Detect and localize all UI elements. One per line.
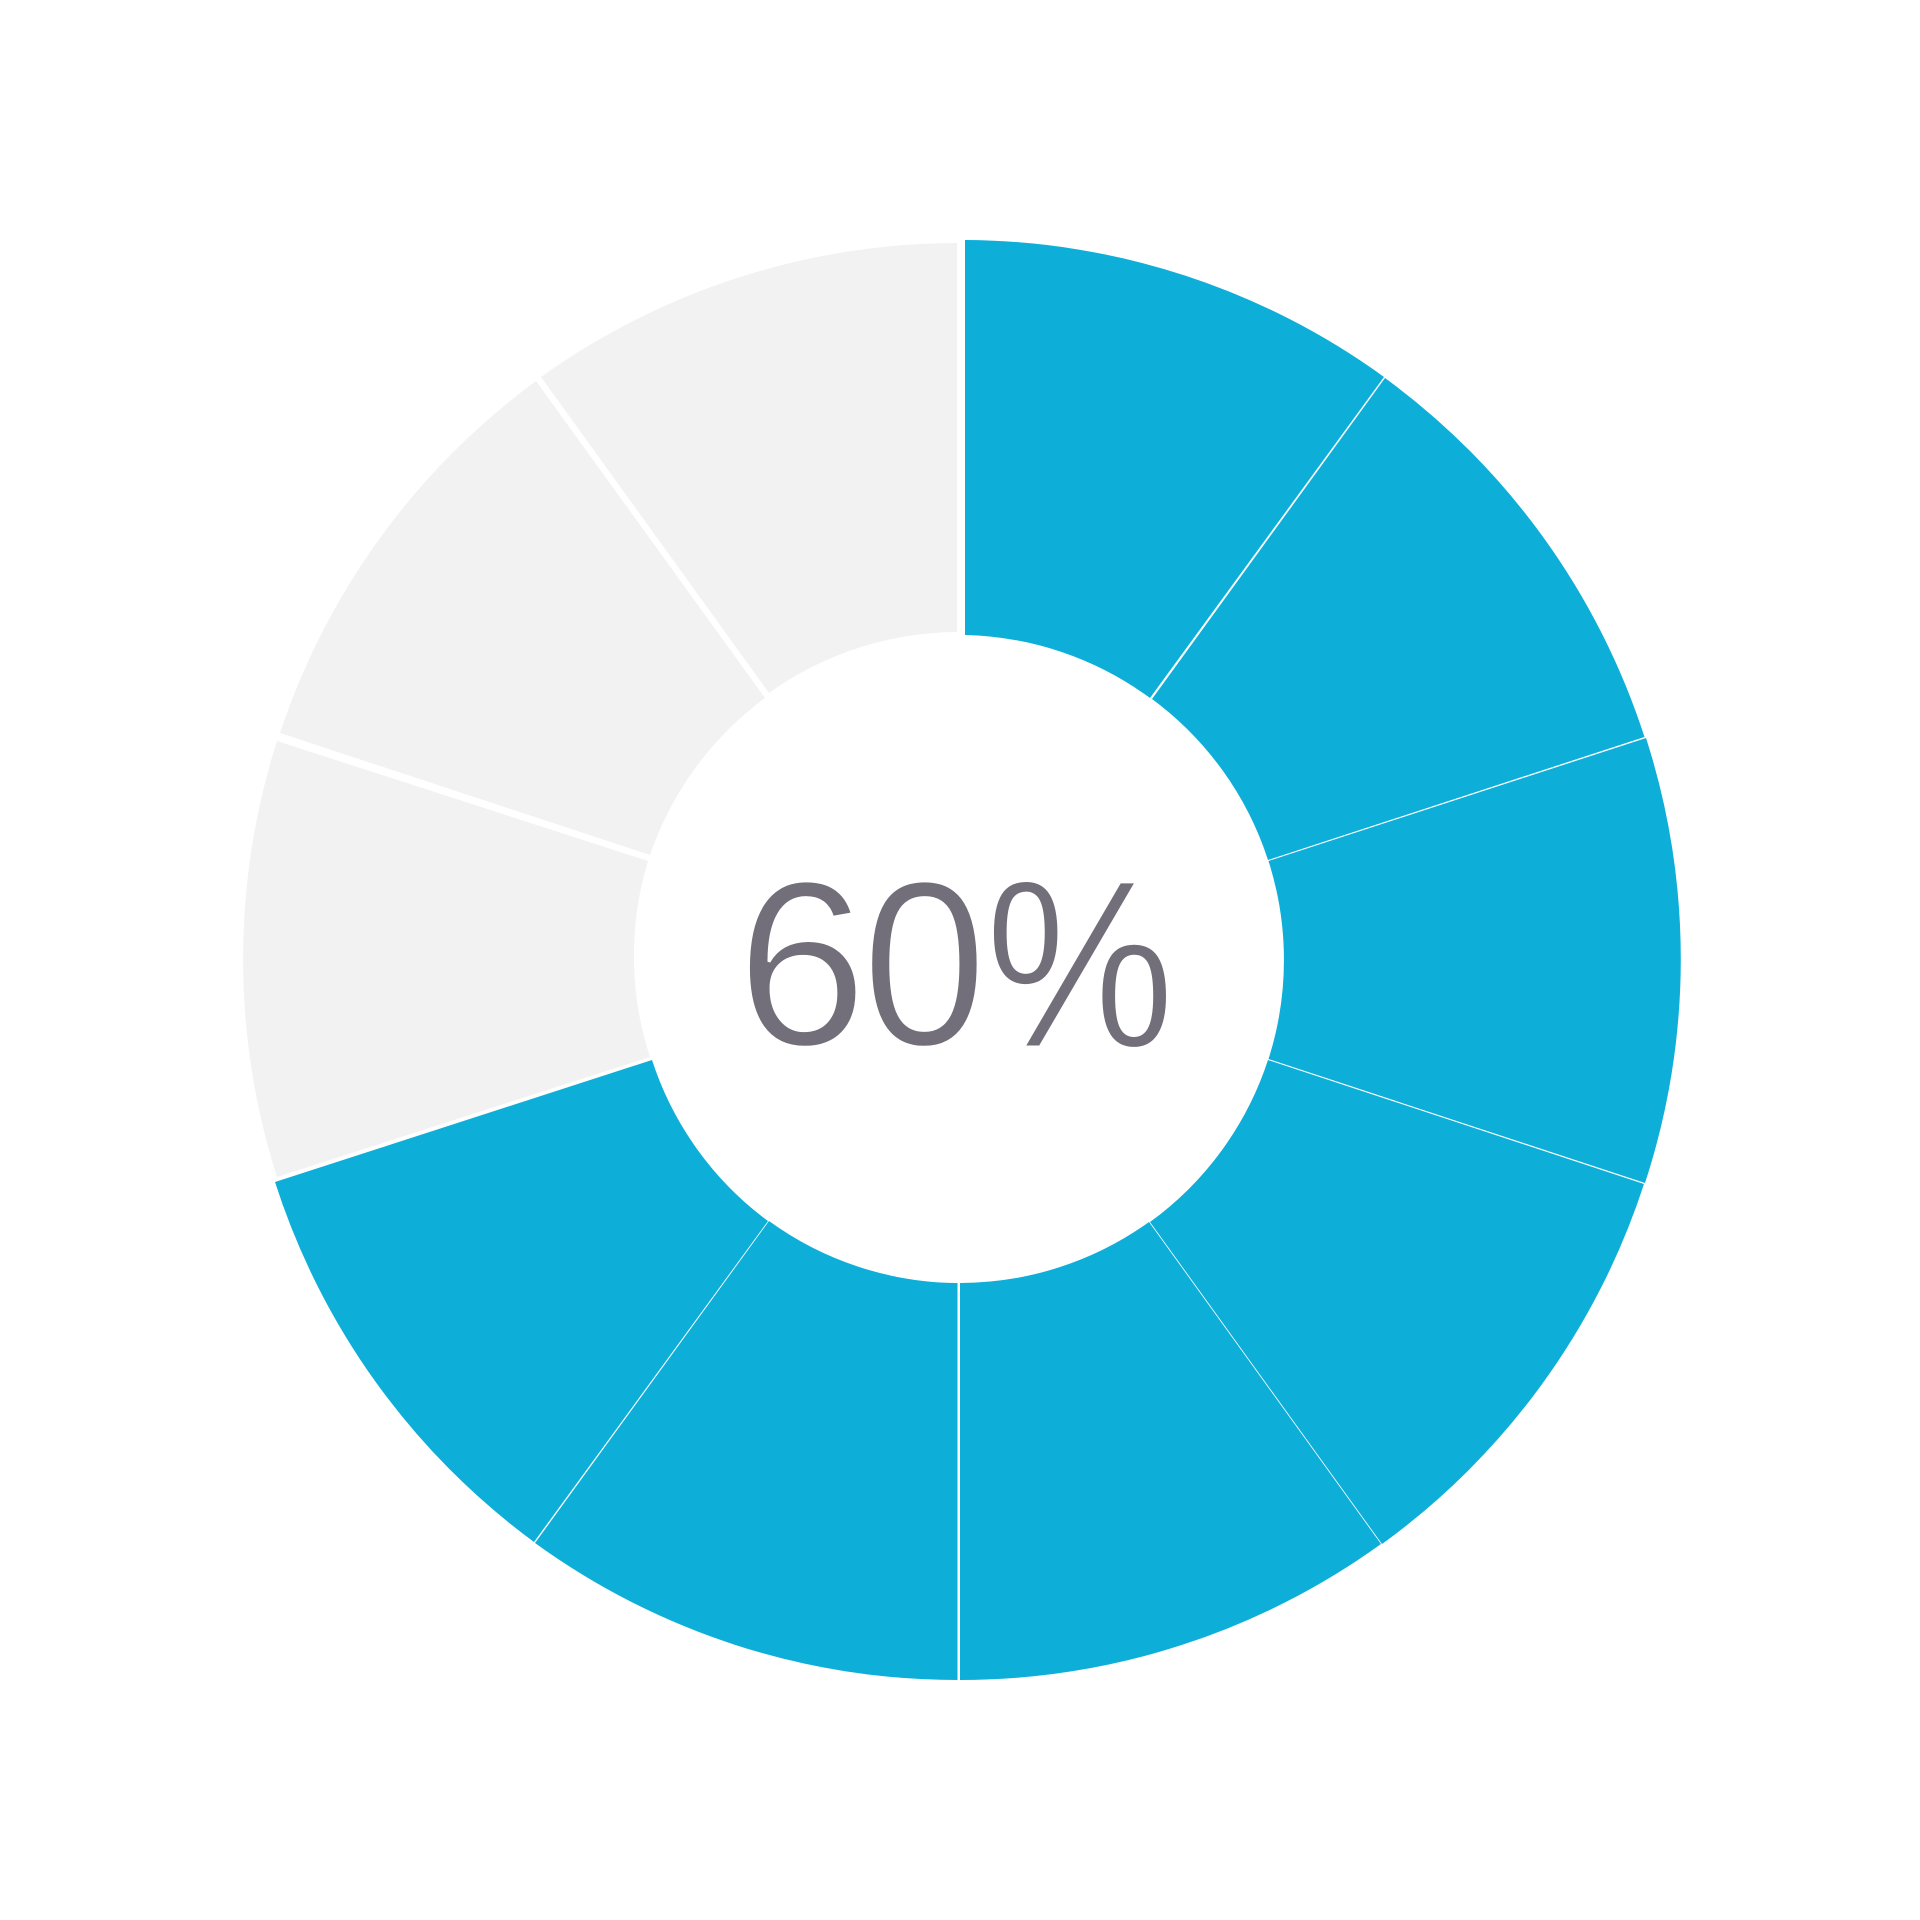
empty segment 9 [280, 381, 765, 855]
center percentage label: % [985, 830, 1175, 1099]
filled segment 3 [1268, 738, 1681, 1183]
filled segment 7 [275, 1060, 768, 1542]
filled segment 4 [1150, 1060, 1644, 1544]
empty segment 10 [541, 243, 957, 693]
empty segment 8 [243, 741, 650, 1177]
filled segment 5 [960, 1222, 1381, 1680]
donut ring: 10 segments, 60% filled [243, 240, 1681, 1680]
center percentage label [736, 830, 1175, 1099]
filled segment 2 [1152, 378, 1644, 860]
filled segment 1 [965, 240, 1384, 698]
center percentage label: 6 [736, 832, 867, 1095]
filled segment 6 [535, 1221, 958, 1680]
center percentage label: 0 [862, 832, 987, 1095]
